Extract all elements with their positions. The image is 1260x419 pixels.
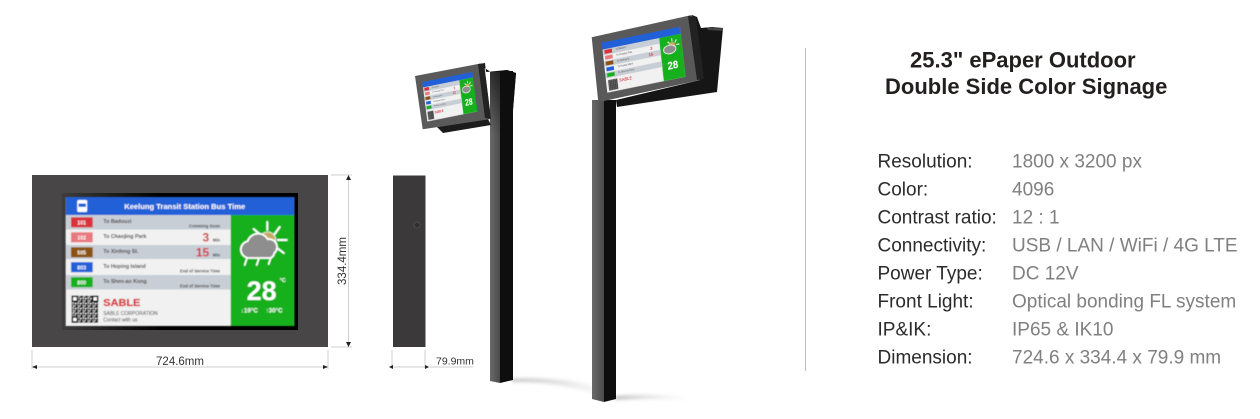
specification labels: Power Type: [878, 264, 983, 284]
specification values: 1800 x 3200 px [1012, 152, 1142, 172]
weather panel: ↓19°C [241, 307, 258, 315]
vertical divider [805, 48, 806, 371]
tilted mini screen: To Chaojing Park [616, 50, 633, 57]
housing [592, 15, 700, 102]
pole [490, 70, 516, 383]
specification labels: Resolution: [878, 152, 973, 172]
dimension: width 724.6mm [32, 350, 328, 369]
front view of sign [32, 175, 328, 347]
housing [415, 64, 491, 129]
title [885, 48, 1167, 99]
arrival rows: To Badouzi [103, 219, 132, 225]
side button [414, 222, 420, 228]
arrival rows: 505 [77, 250, 86, 256]
arrival rows: To Chaojing Park [103, 234, 147, 240]
tilted mini screen [602, 27, 686, 93]
arrival rows: Min [213, 238, 220, 243]
tilted mini screen: To Chaojing Park [432, 88, 444, 94]
weather panel: °C [280, 278, 286, 284]
arrival rows: Comming Soon [189, 224, 220, 228]
specification labels: Contrast ratio: [878, 208, 997, 228]
weather panel: 28 [247, 276, 277, 306]
tilted mini screen: 3 [650, 45, 653, 51]
underside slab [437, 119, 491, 133]
dimension: width 724.6mm: 724.6mm [156, 356, 204, 368]
arrival rows: 803 [77, 265, 86, 271]
weather panel: ↑30°C [265, 307, 283, 315]
specification labels: Color: [878, 180, 928, 200]
arrival rows [66, 215, 231, 290]
arrival rows: End of Service Time [180, 268, 221, 274]
specification values: Optical bonding FL system [1012, 292, 1236, 312]
tilted mini screen: SABLE [619, 75, 633, 83]
small sign on pole [415, 63, 516, 383]
header bar: Keelung Transit Station Bus Time [124, 202, 245, 211]
footer with QR code and brand: SABLE CORPORATION [103, 311, 158, 317]
dimension: height 334.4mm [331, 175, 352, 347]
tilted mini screen: 15 [648, 51, 654, 58]
specification values: 4096 [1012, 180, 1054, 200]
pole [592, 100, 616, 402]
weather panel [231, 215, 294, 326]
mounting bracket [616, 15, 723, 107]
tilted mini screen: To Hoping Island [433, 99, 445, 103]
arrival rows: 101 [77, 220, 86, 226]
dimension: height 334.4mm: 334.4mm [337, 237, 349, 285]
tilted mini screen: 28 [465, 96, 474, 108]
arrival rows: 3 [203, 231, 210, 245]
tilted mini screen: 28 [667, 59, 679, 73]
icon: bus [77, 200, 87, 212]
arrival rows: 102 [77, 236, 86, 242]
specification labels: Front Light: [878, 292, 974, 312]
dimension: depth 79.9mm [389, 350, 474, 369]
screen bezel [62, 193, 298, 330]
icon: sun behind cloud [241, 222, 287, 265]
arrival rows: To Shen-ao Kong [103, 279, 147, 285]
tilted mini screen: To Badouzi [616, 47, 627, 51]
specification values: IP65 & IK10 [1012, 320, 1113, 340]
specification values: USB / LAN / WiFi / 4G LTE [1012, 236, 1238, 256]
arrival rows: To Xinfeng St. [103, 249, 139, 255]
specification labels [878, 152, 997, 368]
tilted mini screen: To Hoping Island [618, 63, 634, 69]
side view of sign [393, 176, 426, 347]
header bar [66, 197, 294, 215]
footer with QR code and brand: Contact with us [103, 318, 138, 324]
footer with QR code and brand: SABLE [103, 298, 141, 309]
tilted mini screen: To Shen-ao Kong [618, 69, 635, 74]
housing dark edge [688, 16, 704, 80]
mounting bracket [478, 63, 516, 140]
specification values: 724.6 x 334.4 x 79.9 mm [1012, 348, 1221, 368]
tilted mini screen: To Shen-ao Kong [434, 103, 446, 108]
specification values: DC 12V [1012, 264, 1079, 284]
specification labels: IP&IK: [878, 320, 931, 340]
large sign on pole [592, 15, 723, 402]
arrival rows: 15 [196, 246, 210, 260]
screen: bus time display [66, 197, 294, 326]
tilted mini screen: SABLE [434, 108, 445, 115]
arrival rows: End of Service Time [180, 284, 221, 288]
tilted mini screen: 3 [453, 86, 456, 91]
specification labels: Connectivity: [878, 236, 986, 256]
title: Double Side Color Signage [885, 74, 1167, 99]
arrival rows: 800 [77, 280, 86, 286]
specification labels: Dimension: [878, 348, 973, 368]
specification values [1012, 152, 1238, 368]
floor shadow between poles [512, 378, 593, 393]
dimension: depth 79.9mm: 79.9mm [436, 356, 474, 368]
tilted mini screen: 15 [453, 90, 456, 96]
specification values: 12 : 1 [1012, 208, 1060, 228]
floor shadow right of tall pole [615, 395, 690, 400]
title: 25.3" ePaper Outdoor [910, 48, 1136, 72]
housing dark edge [478, 64, 491, 119]
front panel housing [32, 175, 328, 347]
tilted mini screen [422, 72, 477, 121]
tilted mini screen: To Xinfeng St. [432, 93, 443, 99]
arrival rows: To Hoping Island [103, 264, 146, 270]
footer with QR code and brand [72, 296, 158, 324]
tilted mini screen: To Xinfeng St. [617, 57, 630, 63]
arrival rows: Min [213, 253, 220, 258]
tilted mini screen: To Badouzi [431, 86, 440, 89]
